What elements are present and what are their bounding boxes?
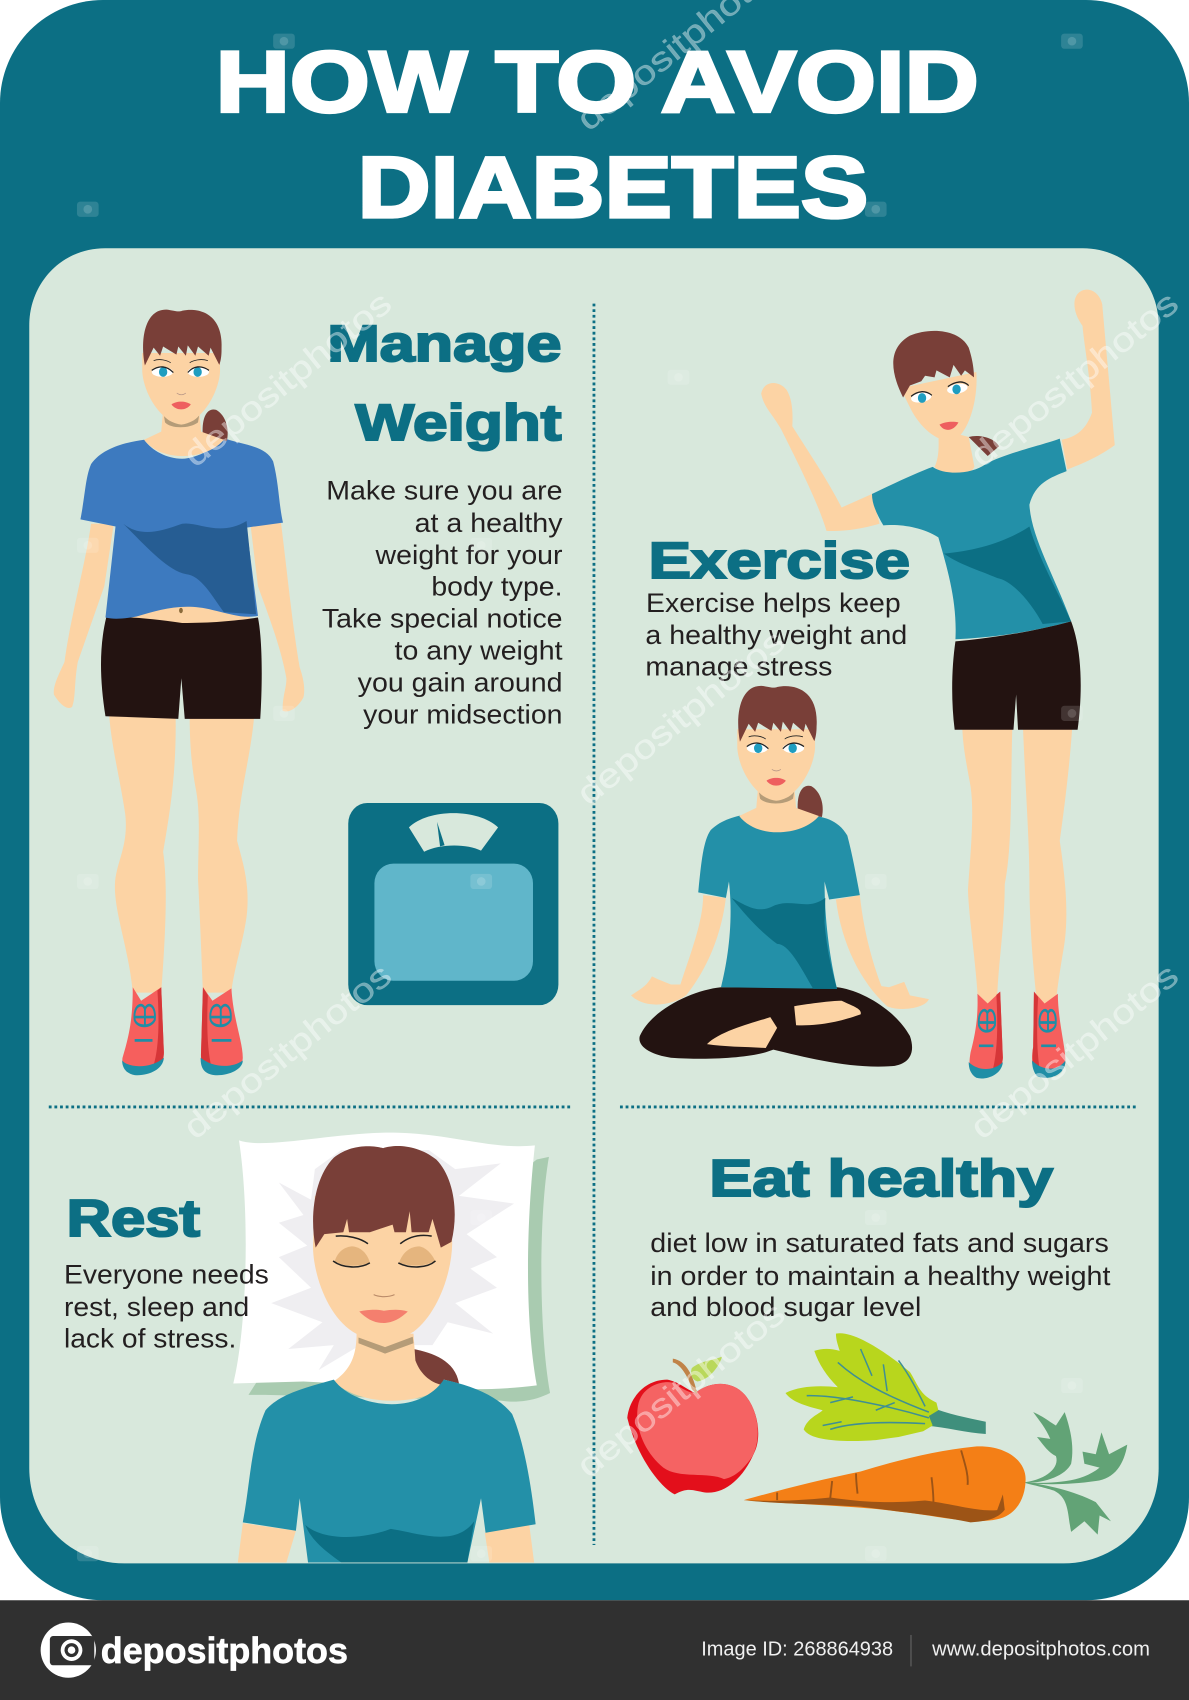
figure: woman with weight gain [54, 310, 304, 1075]
manage weight description: your midsection [363, 699, 563, 730]
exercise description: manage stress [645, 650, 832, 681]
eat healthy description [650, 1227, 1111, 1322]
watermarks: depositphotos [964, 285, 1186, 475]
figure: woman meditating [631, 686, 929, 1067]
heading line two: Weight [356, 394, 561, 451]
eat healthy description: in order to maintain a healthy weight [650, 1260, 1111, 1291]
icon: spinach leaves [785, 1333, 986, 1441]
rest description: lack of stress. [64, 1323, 236, 1354]
manage weight description: Make sure you are [326, 474, 563, 505]
manage weight description: at a healthy [415, 507, 563, 538]
heading: manage weight: Manage [327, 315, 561, 372]
footer bar [0, 1600, 1189, 1700]
watermarks: depositphotos [570, 1295, 792, 1485]
figure: woman sleeping on pillow [233, 1133, 550, 1563]
logo wordmark: depositphotos [101, 1631, 348, 1671]
light content panel [29, 248, 1159, 1563]
manage weight description [322, 474, 563, 730]
rest description [64, 1259, 269, 1354]
manage weight description: weight for your [375, 539, 563, 570]
panel: rest [64, 1133, 550, 1563]
manage weight description: Take special notice [322, 603, 563, 634]
figure: woman stretching [761, 290, 1115, 1078]
title: DIABETES [358, 139, 868, 236]
title: HOW TO AVOID [216, 34, 979, 131]
website: www.depositphotos.com [931, 1638, 1150, 1661]
panel: eat healthy [627, 1150, 1127, 1535]
heading: eat healthy: Eat healthy [709, 1150, 1053, 1208]
icon: carrot [744, 1412, 1127, 1535]
manage weight description: you gain around [358, 667, 563, 698]
rest description: rest, sleep and [64, 1291, 249, 1322]
eat healthy description: and blood sugar level [650, 1291, 921, 1322]
icon: depositphotos logo [41, 1622, 96, 1678]
watermarks: depositphotos [964, 957, 1186, 1147]
exercise description [645, 587, 907, 681]
image id: Image ID: 268864938 [701, 1638, 893, 1661]
manage weight description: body type. [431, 571, 563, 602]
watermarks: depositphotos [570, 623, 792, 813]
rest description: Everyone needs [64, 1259, 269, 1290]
icon: apple [627, 1357, 758, 1494]
food illustrations [627, 1333, 1127, 1535]
panel: exercise [631, 290, 1115, 1078]
exercise description: Exercise helps keep [646, 587, 901, 618]
heading: rest: Rest [67, 1190, 200, 1248]
watermarks: depositphotos [177, 285, 399, 475]
manage weight description: to any weight [395, 635, 563, 666]
eat healthy description: diet low in saturated fats and sugars [650, 1227, 1109, 1258]
exercise description: a healthy weight and [645, 619, 907, 650]
panel: manage weight [54, 310, 563, 1075]
watermarks: depositphotos [177, 957, 399, 1147]
title [216, 34, 979, 236]
heading: exercise: Exercise [649, 532, 910, 589]
icon: bathroom scale [348, 803, 558, 1005]
shoes [122, 987, 164, 1073]
